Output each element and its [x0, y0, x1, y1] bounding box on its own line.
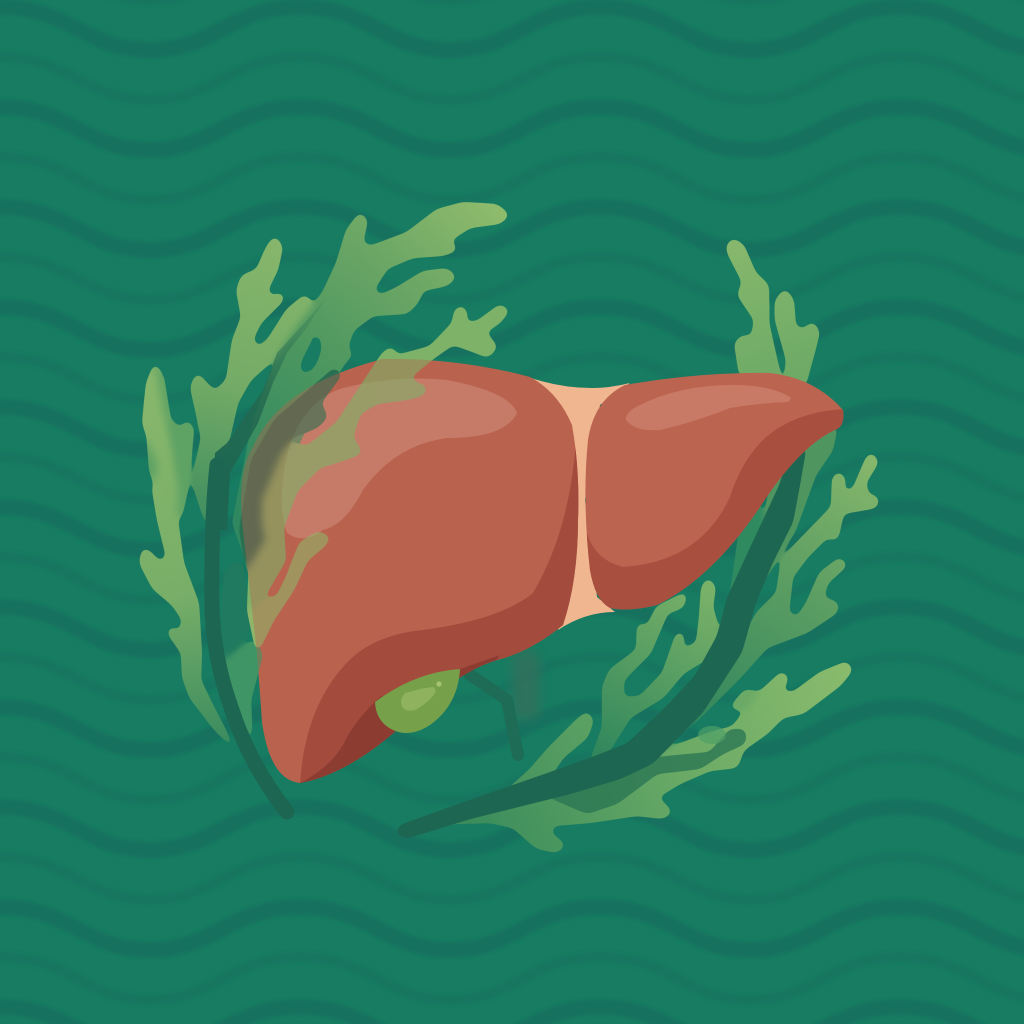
frond: hole in top frond: [301, 338, 321, 372]
liver: [230, 350, 855, 800]
seaweed: darker overlap in lower frond: [547, 730, 745, 813]
frond: far left dark lobe: [145, 363, 193, 530]
frond: top large branching: [233, 203, 509, 570]
frond: branch crossing liver top: [248, 305, 509, 653]
highlight on right lobe: [282, 379, 517, 538]
highlight on left lobe: [626, 385, 791, 430]
gallbladder glint: [436, 681, 442, 687]
shadow band on left lobe: [580, 409, 850, 620]
stem: left upper tapered: [210, 297, 327, 530]
ligament between lobes: [528, 377, 630, 630]
bile duct: dark branching tube: [470, 675, 518, 755]
frond: lower light body: [223, 640, 262, 745]
frond: dark stem across liver: [240, 368, 341, 570]
frond: lower blob between stems: [222, 560, 250, 660]
left lobe of liver: [585, 372, 844, 610]
seaweed: left fronds: [140, 203, 509, 753]
seaweed: right side fronds behind liver: [430, 239, 878, 852]
seaweed showing through liver: [241, 359, 432, 672]
seaweed stem: left lower stem: [212, 465, 287, 812]
frond: far left: [140, 363, 237, 753]
seaweed stem: right curved stem: [396, 440, 805, 838]
blood vessel: faded vertical duct: [512, 650, 540, 720]
gallbladder: [375, 669, 460, 733]
shadow band on right lobe: [300, 447, 578, 783]
seaweed: small round bud: [698, 726, 726, 744]
deep shadow at liver base: [300, 655, 500, 783]
gallbladder highlight: [401, 687, 436, 711]
frond: lower branch crossing liver edge: [248, 532, 330, 653]
right lobe of liver: [241, 359, 578, 783]
frond: second left: [191, 236, 312, 530]
